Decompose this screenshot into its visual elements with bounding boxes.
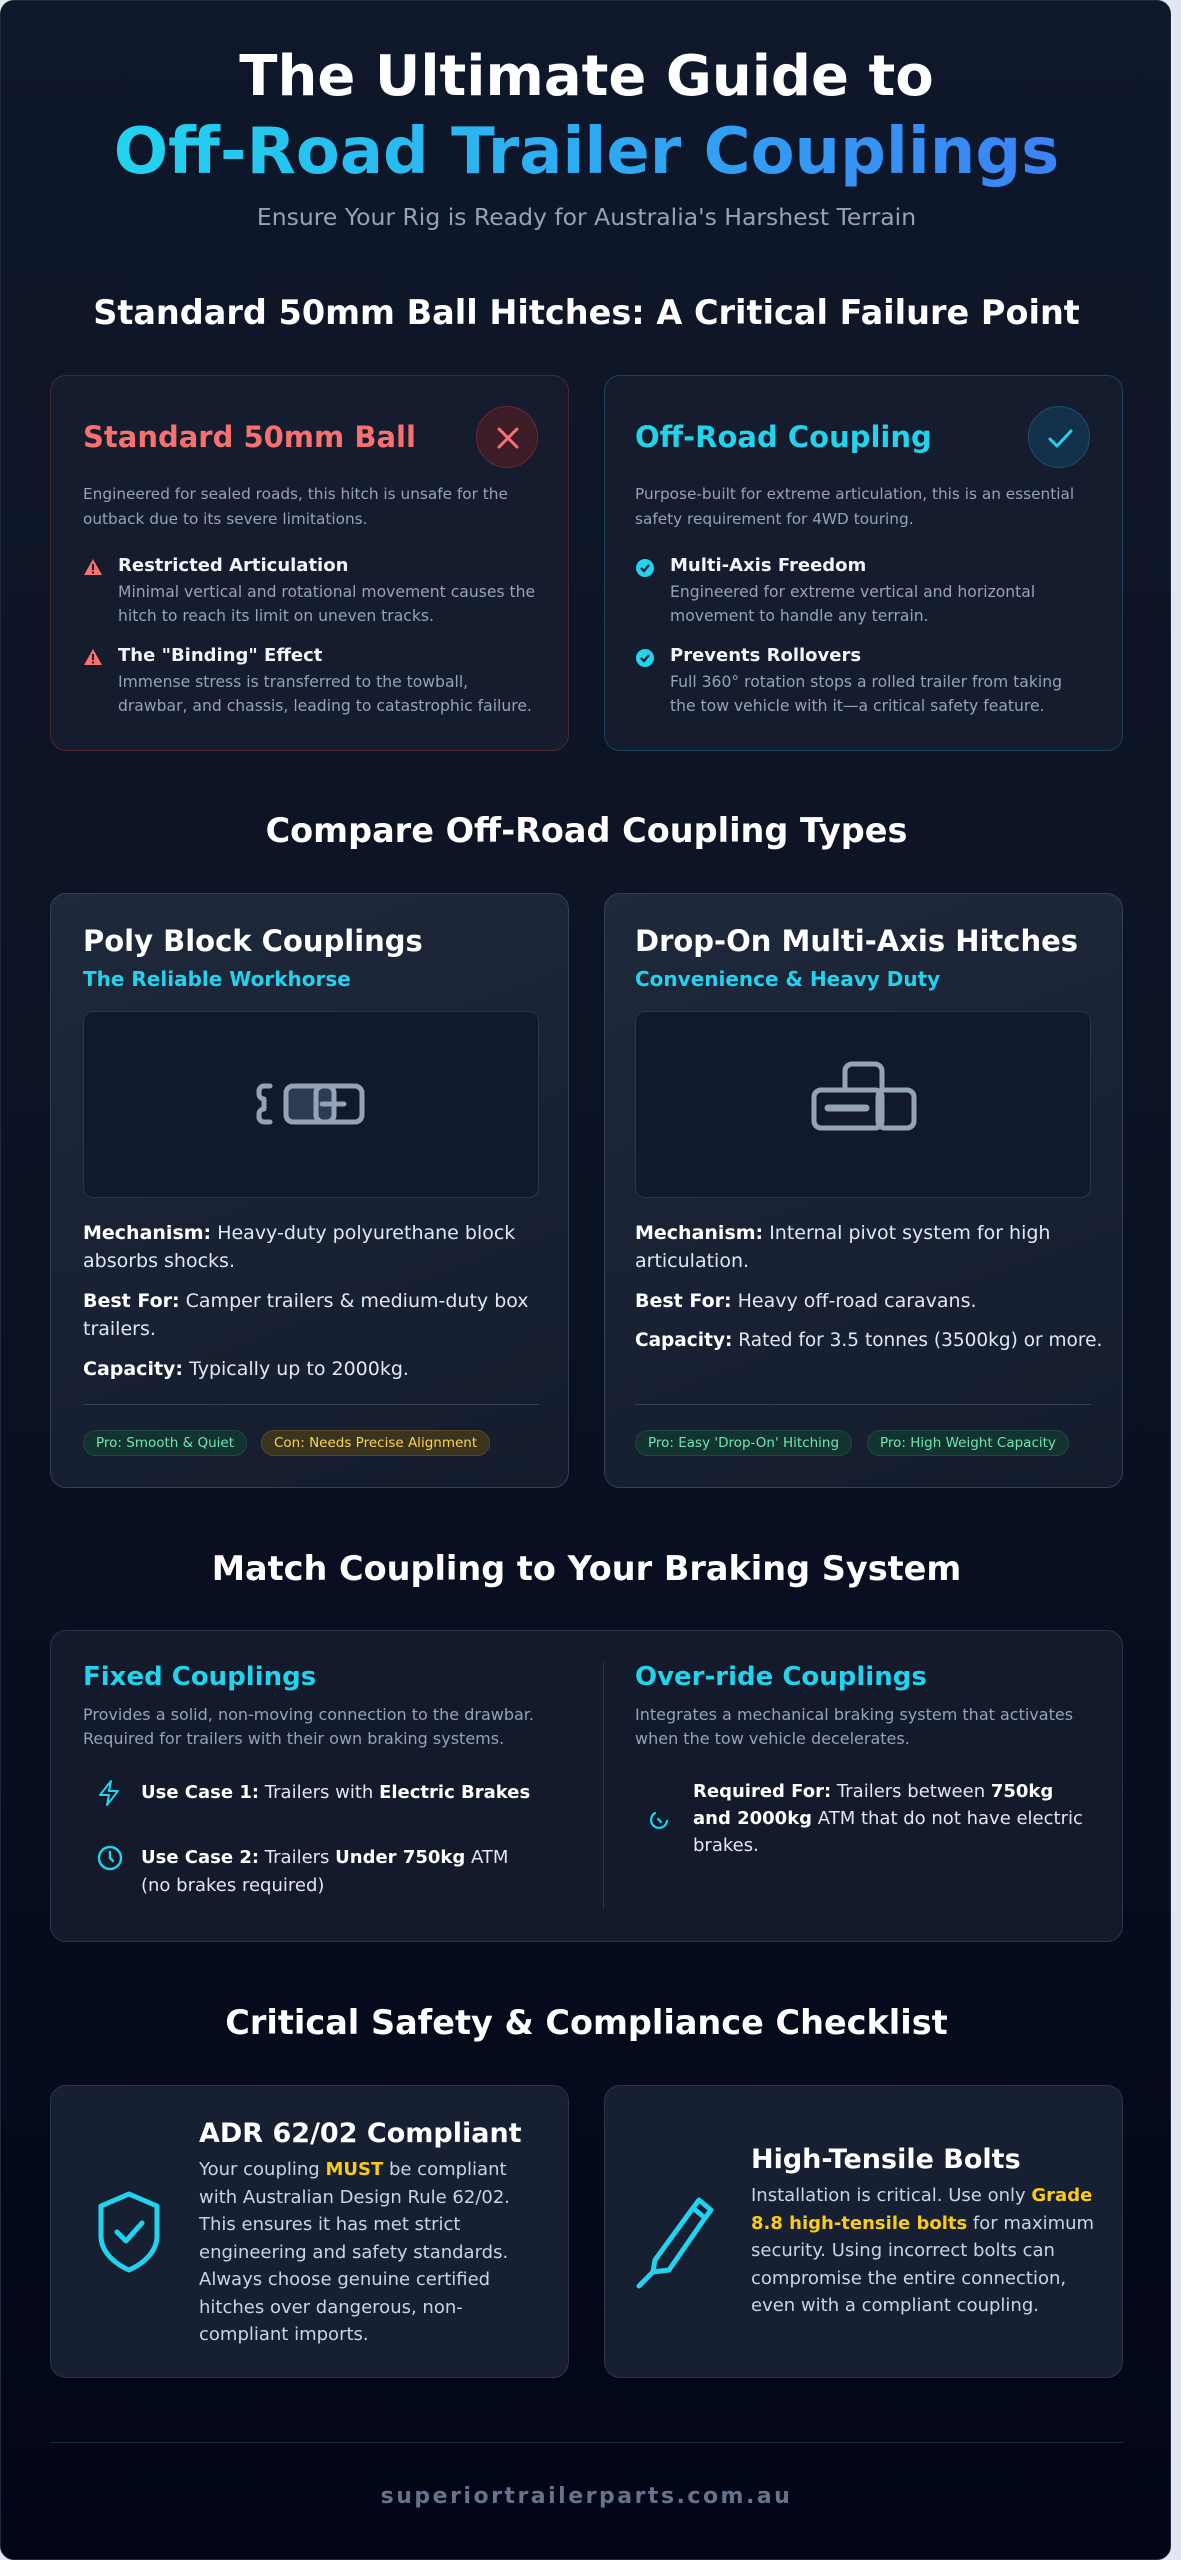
specs: Best For: Heavy off-road caravans. [635,1290,977,1312]
panel: standard ball: Restricted Articulation [118,555,348,576]
subtitle: The Reliable Workhorse [83,967,351,991]
card title: Drop-On Multi-Axis Hitches [635,924,1078,958]
panel: drop-on [604,893,1123,1488]
over-ride couplings: brakes. [693,1835,759,1856]
card title: Standard 50mm Ball [83,420,416,454]
panel: off-road coupling: Prevents Rollovers [670,645,861,666]
icon: x [476,406,538,468]
tags: Pro: Smooth & Quiet [96,1435,234,1451]
panel: braking [50,1630,1123,1942]
panel: standard ball: Minimal vertical and rotational movement causes the hitch to reach its limit on uneven tracks. [118,583,535,625]
fixed couplings: Fixed Couplings [83,1662,316,1692]
heading: failure point: Standard 50mm Ball Hitches: A Critical Failure Point [93,293,1080,332]
tags [635,1430,1069,1456]
over-ride couplings: and 2000kg ATM that do not have electric [693,1808,1083,1829]
specs [83,1222,529,1380]
description: Engineered for sealed roads, this hitch is unsafe for the outback due to its severe limitations. [83,485,508,528]
card title: Off-Road Coupling [635,420,932,454]
item: multi-axis [636,555,1035,625]
icon: bolt/pen [636,2198,714,2288]
bolts title: High-Tensile Bolts [751,2144,1021,2175]
fixed couplings [83,1662,534,1896]
ADR title: ADR 62/02 Compliant [199,2118,522,2149]
fixed couplings: Use Case 1: Trailers with Electric Brakes [141,1782,530,1803]
panel: off-road coupling: Multi-Axis Freedom [670,555,866,576]
panel: poly block [50,893,569,1488]
image box: briefcase icon [635,1011,1091,1198]
panel: off-road coupling: Full 360° rotation stops a rolled trailer from taking [670,673,1062,691]
specs: Mechanism: Heavy-duty polyurethane block absorbs shocks. [83,1222,515,1272]
panel: off-road coupling [604,375,1123,751]
panel: off-road coupling: Engineered for extreme vertical and horizontal movement to handle any terrain. [670,583,1035,625]
panel: ADR [50,2085,569,2378]
panel: standard ball [50,375,569,751]
title: Off-Road Trailer Couplings [114,115,1059,189]
icon: clock [98,1846,122,1870]
specs: Mechanism: Internal pivot system for high articulation. [635,1222,1050,1272]
icon: override [650,1812,668,1829]
over-ride couplings: Required For: Trailers between 750kg [693,1781,1053,1802]
panel: standard ball: The "Binding" Effect [118,645,322,666]
icon: lightning [99,1780,119,1806]
specs: Capacity: Rated for 3.5 tonnes (3500kg) or more. [635,1330,1102,1351]
tags: Con: Needs Precise Alignment [274,1435,477,1451]
specs: Best For: Camper trailers & medium-duty box trailers. [83,1290,529,1340]
fixed couplings: Use Case 2: Trailers Under 750kg ATM [141,1847,508,1868]
icon: check [1028,406,1090,468]
specs [635,1222,1102,1351]
specs: Capacity: Typically up to 2000kg. [83,1358,409,1380]
panel: standard ball: Immense stress is transferred to the towball, [118,673,468,691]
icon: shield [98,2192,160,2272]
ADR body: Your coupling MUST be compliant with Australian Design Rule 62/02. This ensures it has met strict engineering and safety standards. Always choose genuine certified hitches over dangerous, non-compliant imports. [199,2159,510,2345]
fixed couplings: Provides a solid, non-moving connection to the drawbar. Required for trailers with their own braking systems. [83,1705,534,1748]
tags: Pro: Easy 'Drop-On' Hitching [648,1435,839,1451]
heading: braking: Match Coupling to Your Braking System [212,1549,961,1588]
item: restricted articulation [84,555,535,625]
over-ride couplings [635,1662,1083,1856]
subtitle: Convenience & Heavy Duty [635,967,940,991]
item: binding effect [84,645,532,715]
tags [83,1430,490,1456]
over-ride couplings: Integrates a mechanical braking system that activates when the tow vehicle decelerates. [635,1705,1073,1748]
panel: bolts [604,2085,1123,2378]
heading: checklist: Critical Safety & Compliance Checklist [225,2003,948,2042]
panel: standard ball: drawbar, and chassis, leading to catastrophic failure. [118,697,532,715]
bolts body: Installation is critical. Use only Grade 8.8 high-tensile bolts for maximum security. Using incorrect bolts can compromise the entire connection, even with a compliant coupling. [751,2185,1094,2316]
description: Purpose-built for extreme articulation, this is an essential safety requirement for 4WD touring. [635,485,1074,528]
footer: superiortrailerparts.com.au [381,2484,792,2509]
heading: compare types: Compare Off-Road Coupling Types [266,811,907,850]
card title: Poly Block Couplings [83,924,423,958]
subtitle: Ensure Your Rig is Ready for Australia's Harshest Terrain [257,203,916,231]
tags: Pro: High Weight Capacity [880,1435,1056,1451]
fixed couplings: (no brakes required) [141,1875,324,1896]
item: rollovers [636,645,1062,715]
over-ride couplings: Over-ride Couplings [635,1662,927,1692]
title: The Ultimate Guide to [239,44,934,109]
image box: link icon [83,1011,539,1198]
title [114,44,1059,189]
panel: off-road coupling: the tow vehicle with it—a critical safety feature. [670,697,1045,715]
